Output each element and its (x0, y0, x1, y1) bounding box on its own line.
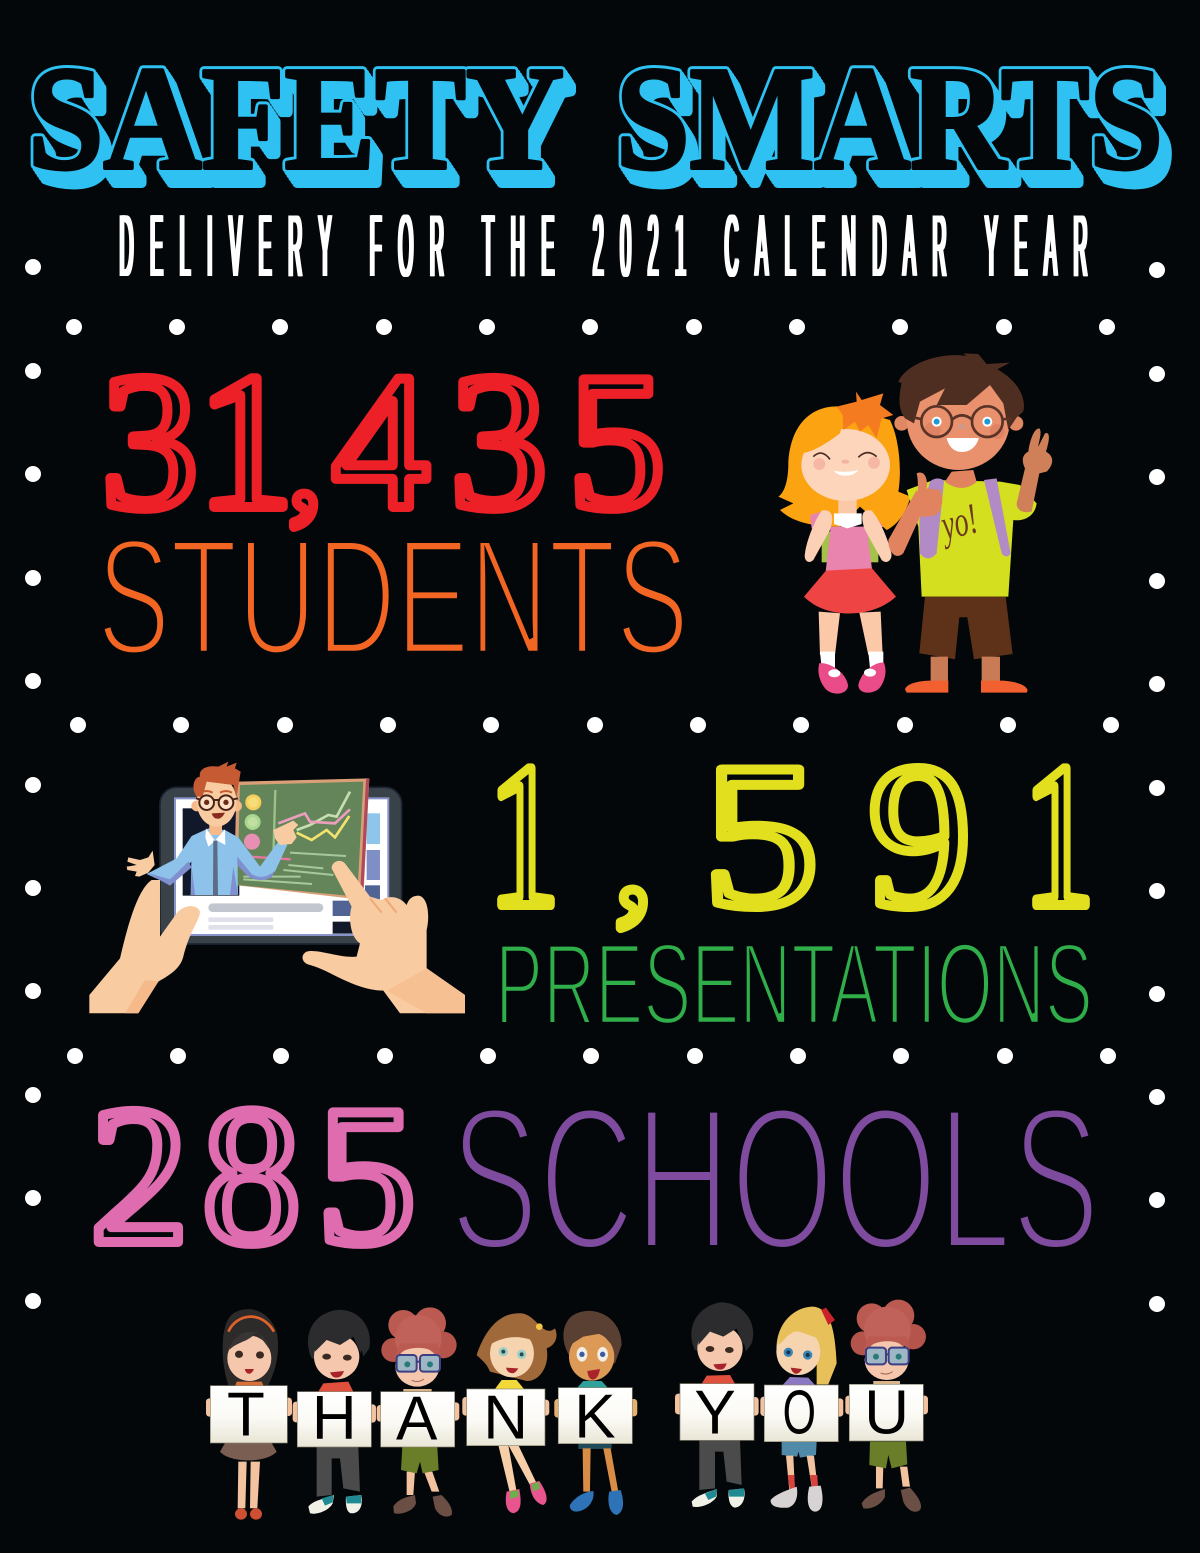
left hand (89, 880, 200, 1013)
stat: 31,435: 3 (450, 334, 548, 550)
boy (888, 353, 1052, 693)
title (28, 37, 1163, 201)
decorative dots (25, 259, 1165, 1312)
label: students: STUDENTS (97, 505, 689, 690)
illustration: kids spelling THANK (206, 1307, 637, 1520)
stat: 1,591: 9 (868, 721, 972, 950)
illustration: kids spelling YOU (675, 1300, 928, 1512)
boy: yo! (933, 493, 982, 550)
kid U: U (864, 1378, 909, 1447)
stat: 1,591: 5 (703, 721, 819, 950)
kid O: O (783, 1378, 816, 1447)
stat: 31,435: 3 (101, 334, 198, 550)
kid K (554, 1311, 637, 1515)
teacher (127, 762, 298, 895)
stat: 1,591: 1 (1023, 721, 1095, 950)
tablet (160, 787, 402, 944)
title: SAFETY (28, 37, 564, 201)
stat: 31,435: 1 (197, 334, 294, 550)
stat: 31,435: 4 (332, 334, 430, 550)
kid T (206, 1309, 292, 1520)
subtitle: DELIVERY FOR THE 2021 CALENDAR YEAR (120, 196, 1088, 295)
stat: 285: 8 (202, 1066, 301, 1285)
stat: 1,591: 1 (488, 721, 560, 950)
kid Y (675, 1302, 759, 1508)
stat: 31,435: 5 (568, 334, 666, 550)
illustration: teacher on tablet (89, 762, 465, 1013)
kid N: N (483, 1383, 528, 1452)
kid Y: Y (694, 1378, 736, 1447)
kid A: A (396, 1385, 438, 1454)
stat: 1,591 (488, 721, 1095, 950)
stat: 285: 5 (317, 1066, 416, 1285)
kid H: H (312, 1384, 357, 1453)
kid N (462, 1313, 557, 1513)
girl (778, 392, 911, 694)
kid U (845, 1300, 928, 1512)
right hand (303, 861, 465, 1013)
chalkboard with chart (234, 778, 369, 900)
kid K: K (574, 1383, 616, 1452)
kid T: T (227, 1381, 265, 1450)
kid O (760, 1307, 843, 1512)
stat: 1,591: , (615, 772, 652, 938)
title: SAFETY (28, 37, 564, 201)
kid A (377, 1307, 459, 1517)
stat: 285: 2 (90, 1066, 189, 1285)
stat: 31,435: , (289, 392, 322, 536)
kid H (293, 1310, 376, 1514)
illustration: two students (778, 353, 1052, 694)
